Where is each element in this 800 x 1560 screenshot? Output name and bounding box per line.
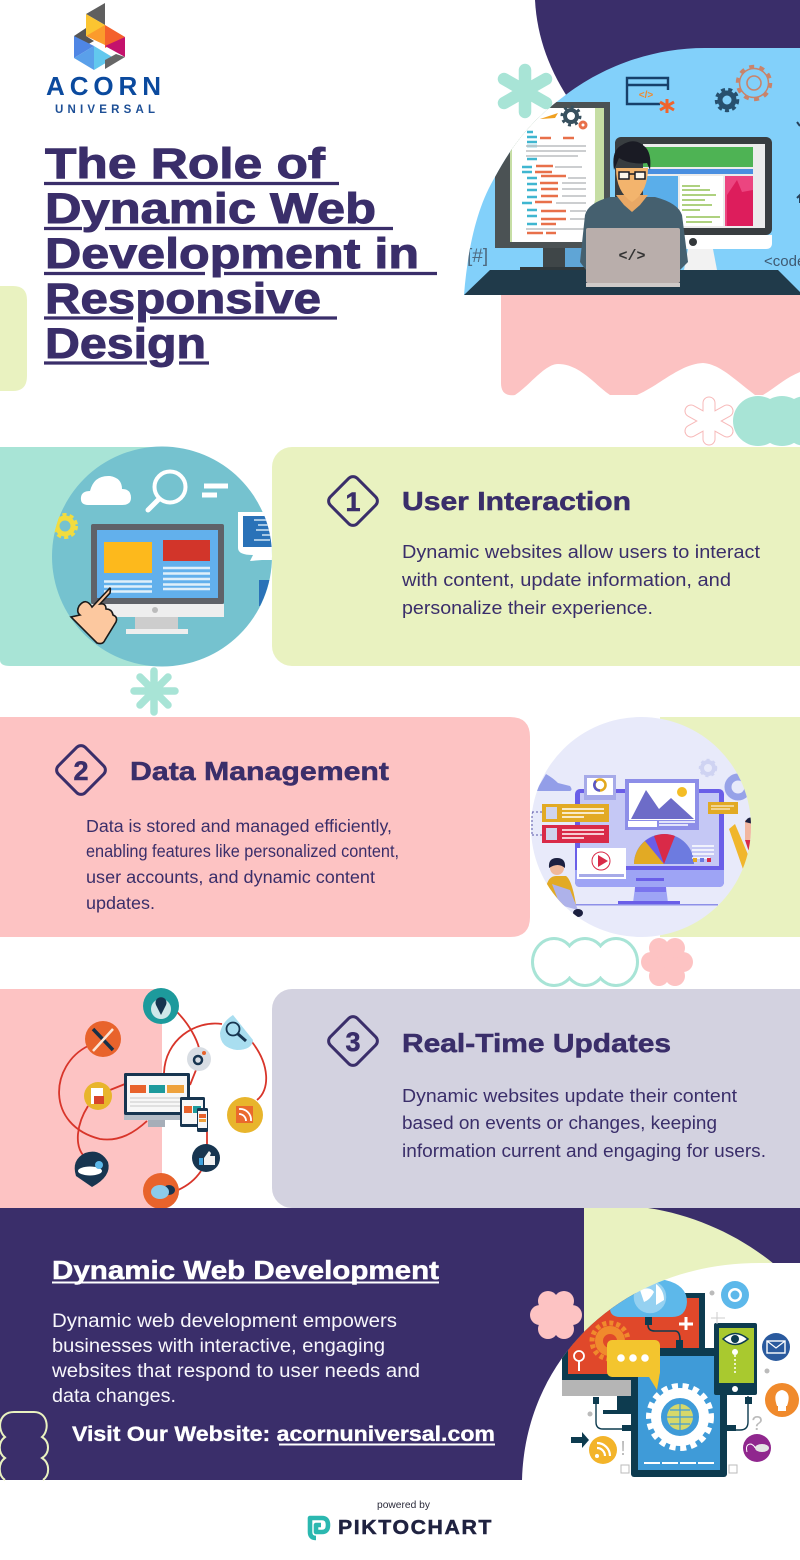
body text: Dynamic websites allow users to interact bbox=[402, 541, 760, 562]
panel: data management bbox=[0, 717, 800, 937]
number badge 1: 1 bbox=[345, 487, 361, 517]
number badge 3: 3 bbox=[345, 1027, 361, 1057]
body text: Data is stored and managed efficiently, bbox=[86, 816, 392, 836]
icon: tools bbox=[85, 1021, 121, 1057]
pink card bbox=[0, 717, 530, 937]
pink wavy shape bbox=[501, 290, 800, 395]
body text: information current and engaging for users. bbox=[402, 1140, 766, 1161]
powered by Piktochart: PIKTOCHART bbox=[338, 1517, 493, 1539]
desk scene bbox=[464, 102, 800, 295]
heading: User Interaction bbox=[402, 486, 631, 516]
dark marks at right edge bbox=[797, 122, 800, 203]
pink flower bbox=[641, 938, 693, 986]
body text: personalize their experience. bbox=[402, 597, 653, 618]
title: Design bbox=[45, 320, 206, 368]
icon: video file bbox=[84, 1082, 112, 1110]
number badge 2 bbox=[54, 743, 108, 797]
powered by Piktochart: powered by bbox=[377, 1499, 431, 1511]
purple background bbox=[0, 1208, 800, 1480]
icon: code window bbox=[627, 78, 674, 113]
icon: gears bbox=[716, 66, 770, 110]
sky background bbox=[464, 48, 800, 295]
body text: with content, update information, and bbox=[401, 569, 731, 590]
body text: user accounts, and dynamic content bbox=[86, 867, 375, 887]
logo: Acorn Universal: ACORN bbox=[46, 71, 161, 101]
pink outline asterisk bbox=[691, 403, 727, 439]
powered by Piktochart bbox=[310, 1499, 493, 1539]
grey card bbox=[272, 989, 800, 1208]
mint asterisk bbox=[504, 70, 546, 112]
body text bbox=[51, 1311, 420, 1407]
icon: globe bbox=[143, 988, 179, 1024]
lime curved shape bbox=[584, 1208, 774, 1345]
body text bbox=[402, 1085, 766, 1161]
icon: code window: </> bbox=[639, 90, 653, 101]
icon: thumbs up bbox=[192, 1144, 220, 1172]
body text: Dynamic web development empowers bbox=[52, 1311, 397, 1332]
network illustration bbox=[59, 988, 266, 1209]
body text: enabling features like personalized content, bbox=[86, 841, 399, 861]
mint blob bbox=[733, 396, 800, 446]
circle illustration: dashboard bbox=[531, 717, 753, 937]
pink flower bbox=[530, 1291, 582, 1339]
heading: Data Management bbox=[130, 756, 389, 786]
icon: rss bbox=[227, 1097, 263, 1133]
icon: pointing hand bbox=[71, 588, 117, 644]
mint asterisk below panel one bbox=[134, 671, 175, 712]
man bbox=[580, 197, 688, 270]
heading: Real-Time Updates bbox=[402, 1028, 671, 1058]
body text: Dynamic websites update their content bbox=[402, 1085, 737, 1106]
number badge 1 bbox=[326, 474, 380, 528]
panel: user interaction bbox=[0, 446, 800, 666]
white curved shape with illustration bbox=[522, 1263, 800, 1480]
panel: real-time updates bbox=[0, 988, 800, 1209]
title: Responsive bbox=[45, 275, 321, 323]
icon: cloud bbox=[75, 1152, 109, 1187]
website link: Visit Our Website: acornuniversal.com bbox=[72, 1423, 495, 1446]
number badge 2: 2 bbox=[73, 756, 89, 786]
body text: websites that respond to user needs and bbox=[51, 1361, 420, 1382]
red connecting arcs bbox=[59, 1012, 266, 1190]
body text bbox=[401, 541, 760, 618]
circle illustration: monitor bbox=[52, 446, 273, 666]
decorative lime pill bbox=[0, 286, 27, 391]
icon: chat bbox=[143, 1173, 179, 1209]
title bbox=[44, 140, 437, 368]
panel: footer summary bbox=[0, 1208, 800, 1480]
title: The Role of bbox=[45, 140, 326, 188]
desk scene: </> bbox=[618, 248, 646, 265]
heading: Dynamic Web Development bbox=[52, 1255, 439, 1285]
body text: businesses with interactive, engaging bbox=[52, 1336, 385, 1357]
body text: data changes. bbox=[52, 1386, 176, 1407]
white curved shape with illustration: ! bbox=[620, 1438, 626, 1460]
title: Dynamic Web bbox=[45, 185, 376, 233]
number badge 3 bbox=[326, 1014, 380, 1068]
logo: Acorn Universal bbox=[46, 3, 161, 116]
mint background bbox=[0, 447, 170, 666]
hero illustration: developer at desk bbox=[464, 48, 800, 395]
logo: Acorn Universal: UNIVERSAL bbox=[55, 104, 155, 116]
body text: updates. bbox=[86, 893, 155, 913]
white curved shape with illustration: ? bbox=[751, 1413, 763, 1435]
lime card bbox=[272, 447, 800, 666]
devices bbox=[124, 1073, 208, 1132]
lime background bbox=[660, 717, 800, 937]
body text: based on events or changes, keeping bbox=[402, 1112, 717, 1133]
decorative purple blob top right bbox=[535, 0, 800, 104]
pink background bbox=[0, 989, 162, 1208]
icon: gear bbox=[187, 1047, 211, 1071]
cream outline blob bbox=[0, 1412, 48, 1480]
mint outline blob bbox=[531, 937, 639, 987]
title: Development in bbox=[45, 230, 419, 278]
desk scene: [#] bbox=[467, 246, 488, 267]
icon: magnifier bbox=[220, 1015, 253, 1050]
body text bbox=[86, 816, 399, 913]
